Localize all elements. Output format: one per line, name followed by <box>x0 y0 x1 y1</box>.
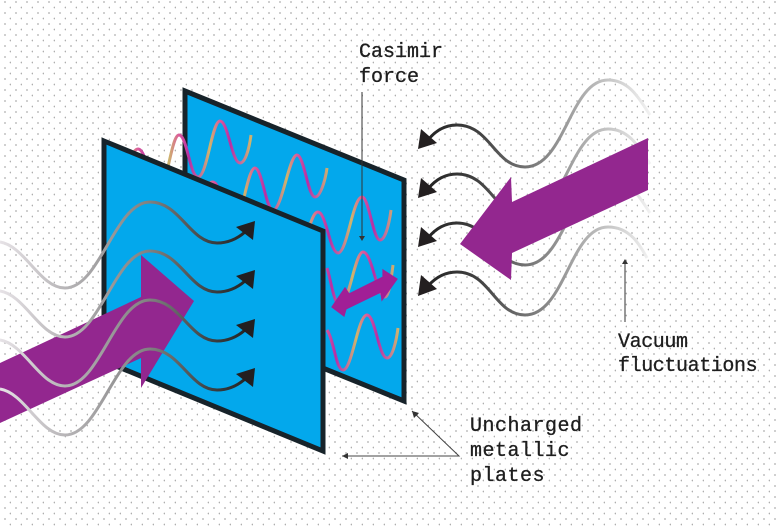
left vacuum fluctuation waves <box>0 202 245 435</box>
right wave arrowheads <box>418 129 437 296</box>
label: Vacuum fluctuations: fluctuations <box>618 355 757 378</box>
left purple force arrow <box>0 255 194 423</box>
standing waves between the plates <box>130 121 398 370</box>
right purple force arrow <box>460 138 648 280</box>
label: Uncharged metallic plates: plates <box>470 465 545 488</box>
back metallic plate <box>185 91 404 401</box>
label: Vacuum fluctuations: Vacuum <box>618 331 688 354</box>
front metallic plate <box>104 141 323 451</box>
Casimir force pointer <box>359 92 365 241</box>
Vacuum fluctuations pointer <box>622 259 628 322</box>
label: Uncharged metallic plates: metallic <box>470 440 570 463</box>
plates pointer <box>342 411 459 459</box>
label: Uncharged metallic plates: Uncharged <box>470 415 583 438</box>
left wave arrowheads <box>236 221 255 387</box>
label: Casimir force: Casimir <box>359 41 443 64</box>
right vacuum fluctuation waves <box>428 80 650 315</box>
label: Casimir force: force <box>359 66 419 89</box>
Casimir force double arrow <box>332 270 397 316</box>
